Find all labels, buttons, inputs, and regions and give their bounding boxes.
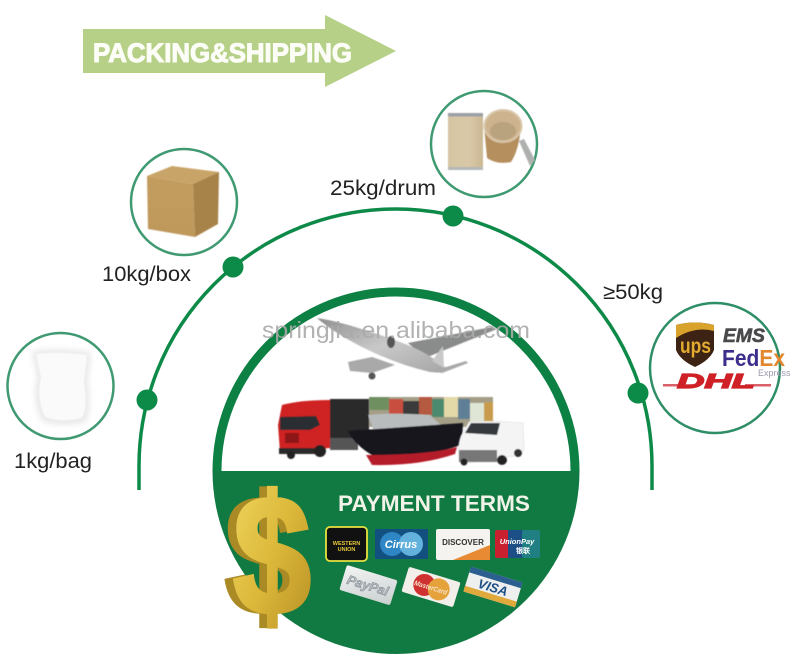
card: Cirrus: Cirrus bbox=[385, 539, 417, 551]
bag option circle bbox=[8, 333, 114, 439]
watermark: springjia.en.alibaba.com bbox=[262, 317, 530, 343]
title text: PACKING&SHIPPING bbox=[93, 38, 352, 68]
icon: ship hull bbox=[348, 414, 463, 465]
icon: UPS shield bbox=[676, 322, 714, 367]
label: 25kg/drum: 25kg/drum bbox=[330, 177, 436, 200]
icon: cardboard box bbox=[147, 166, 219, 237]
panel: shipping half bbox=[217, 292, 575, 471]
icon: fiber drums bbox=[448, 110, 535, 170]
card: MasterCard bbox=[401, 567, 461, 607]
card: PayPal bbox=[339, 565, 398, 605]
label: >=50kg: ≥50kg bbox=[603, 281, 663, 304]
card: Western Union bbox=[326, 527, 367, 561]
timeline dot: 10kg bbox=[222, 256, 244, 278]
card: MasterCard: MasterCard bbox=[413, 580, 448, 597]
drum option circle bbox=[431, 91, 537, 197]
card: Visa bbox=[463, 567, 523, 607]
card: Cirrus bbox=[375, 529, 428, 559]
icon: white bag bbox=[32, 349, 91, 425]
icon: dollar sign: $ bbox=[224, 461, 304, 651]
central shipping and payment circle bbox=[212, 292, 580, 654]
card: Discover: DISCOVER bbox=[442, 538, 484, 547]
timeline arc bbox=[139, 209, 652, 490]
logo: EMS: EMS bbox=[723, 326, 765, 347]
logo: FedEx Express: FedEx bbox=[722, 345, 785, 371]
card: Visa: VISA bbox=[476, 576, 510, 599]
card: Discover bbox=[436, 529, 490, 560]
icon: UPS shield: ups bbox=[680, 335, 711, 358]
logo: DHL: DHL bbox=[677, 371, 755, 393]
card: UnionPay: 银联 bbox=[516, 546, 531, 555]
icon: white van bbox=[458, 421, 524, 466]
label: 10kg/box: 10kg/box bbox=[102, 263, 192, 286]
heading: payment terms: PAYMENT TERMS bbox=[338, 491, 530, 516]
card: UnionPay: UnionPay bbox=[500, 537, 535, 546]
icon: container ship bbox=[369, 397, 493, 427]
courier option circle bbox=[650, 303, 790, 433]
logo: FedEx Express: Express bbox=[758, 368, 790, 378]
box option circle bbox=[131, 149, 237, 255]
label: 1kg/bag: 1kg/bag bbox=[14, 450, 92, 473]
timeline dot: 1kg bbox=[136, 390, 158, 410]
icon: red truck bbox=[278, 399, 369, 459]
card: UnionPay bbox=[495, 530, 540, 558]
card: Western Union: WESTERN bbox=[333, 541, 360, 547]
icon: dollar sign: $ bbox=[233, 461, 311, 651]
card: PayPal: PayPal bbox=[345, 572, 391, 599]
timeline dot: 50kg bbox=[628, 382, 648, 404]
title arrow: packing and shipping bbox=[83, 15, 396, 87]
icon: airplane bbox=[317, 318, 497, 380]
timeline dot: 25kg bbox=[442, 206, 464, 226]
panel: payment half bbox=[212, 471, 580, 654]
card: Western Union: UNION bbox=[338, 547, 355, 553]
logo: DHL bbox=[663, 371, 771, 393]
